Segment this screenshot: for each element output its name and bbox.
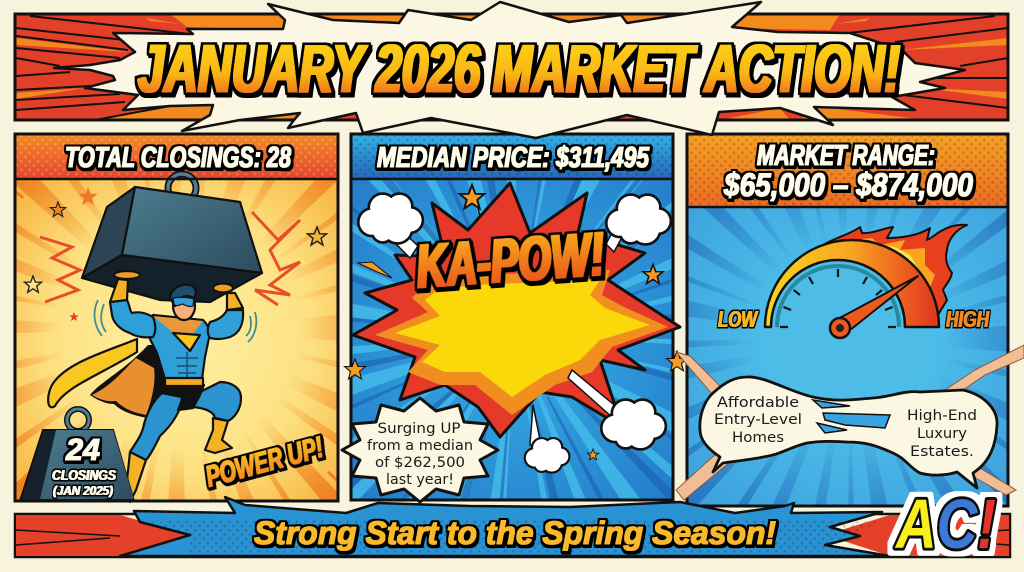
header: market range: MARKET RANGE: bbox=[757, 140, 935, 172]
stars and zigzag bursts bbox=[24, 187, 326, 342]
icon: large weight bbox=[82, 174, 262, 302]
gauge label low: LOW bbox=[718, 306, 759, 332]
ka-pow lettering: KA-POW! bbox=[414, 220, 607, 302]
banner blue burst bbox=[120, 497, 890, 556]
icon: small weight 24 closings: 24 bbox=[65, 432, 100, 467]
header: median price bbox=[351, 134, 673, 179]
header: median price: MEDIAN PRICE: $311,495 bbox=[377, 142, 650, 174]
gauge arc bbox=[765, 240, 939, 327]
title burst bbox=[54, 2, 965, 138]
bubble text: luxury estates: High-End bbox=[907, 408, 977, 424]
banner red wedges bbox=[16, 515, 1009, 556]
bubble text: luxury estates bbox=[907, 408, 977, 460]
icon: small weight 24 closings bbox=[20, 409, 134, 501]
header: market range bbox=[687, 134, 1008, 207]
bubble text: luxury estates: Estates. bbox=[910, 444, 974, 460]
gauge dial ticks bbox=[777, 266, 899, 327]
bubble text: affordable homes: Affordable bbox=[717, 395, 799, 411]
panel background with rays bbox=[352, 180, 672, 498]
hands pulling bbox=[676, 345, 1024, 500]
callout: surging up bbox=[342, 398, 498, 502]
gauge flames bbox=[813, 225, 967, 315]
panel background with rays bbox=[16, 180, 336, 500]
callout: surging up: Surging UP bbox=[378, 421, 460, 437]
logo: AC!: AC! bbox=[894, 485, 996, 563]
panel: total closings bbox=[14, 132, 340, 504]
stars and lightning bbox=[345, 185, 687, 460]
gauge label high: HIGH bbox=[946, 306, 989, 332]
power up label: POWER UP! bbox=[202, 431, 327, 494]
panel background with rays bbox=[688, 208, 1006, 504]
chart: gauge bbox=[765, 225, 967, 338]
callout: surging up: last year! bbox=[386, 472, 454, 488]
hero cape bbox=[48, 339, 165, 418]
header: total closings bbox=[15, 134, 338, 179]
callout: surging up: of $262,500 bbox=[375, 455, 465, 471]
stretchy speech bubble bbox=[676, 345, 1024, 500]
panel: median price bbox=[340, 132, 684, 504]
header: market range: $65,000 – $874,000 bbox=[723, 167, 973, 203]
smoke clouds bbox=[360, 195, 670, 472]
hero body bbox=[110, 271, 243, 386]
hero head bbox=[170, 285, 196, 320]
icon: small weight 24 closings: CLOSINGS bbox=[52, 467, 116, 484]
bubble text: affordable homes bbox=[714, 395, 802, 446]
callout: surging up: from a median bbox=[367, 438, 473, 454]
bottom banner bbox=[15, 497, 1010, 557]
header: total closings: TOTAL CLOSINGS: 28 bbox=[65, 142, 292, 174]
ka-pow burst bbox=[353, 183, 680, 437]
icon: small weight 24 closings: (JAN 2025) bbox=[53, 483, 113, 498]
gauge needle bbox=[830, 276, 918, 338]
bubble text: affordable homes: Homes bbox=[732, 430, 784, 446]
hero legs bbox=[127, 382, 241, 502]
top banner bbox=[15, 14, 1008, 120]
panel: market range bbox=[660, 134, 1024, 530]
bubble text: luxury estates: Luxury bbox=[917, 426, 967, 442]
bubble text: affordable homes: Entry-Level bbox=[714, 412, 802, 428]
banner slogan: Strong Start to the Spring Season! bbox=[254, 515, 776, 551]
